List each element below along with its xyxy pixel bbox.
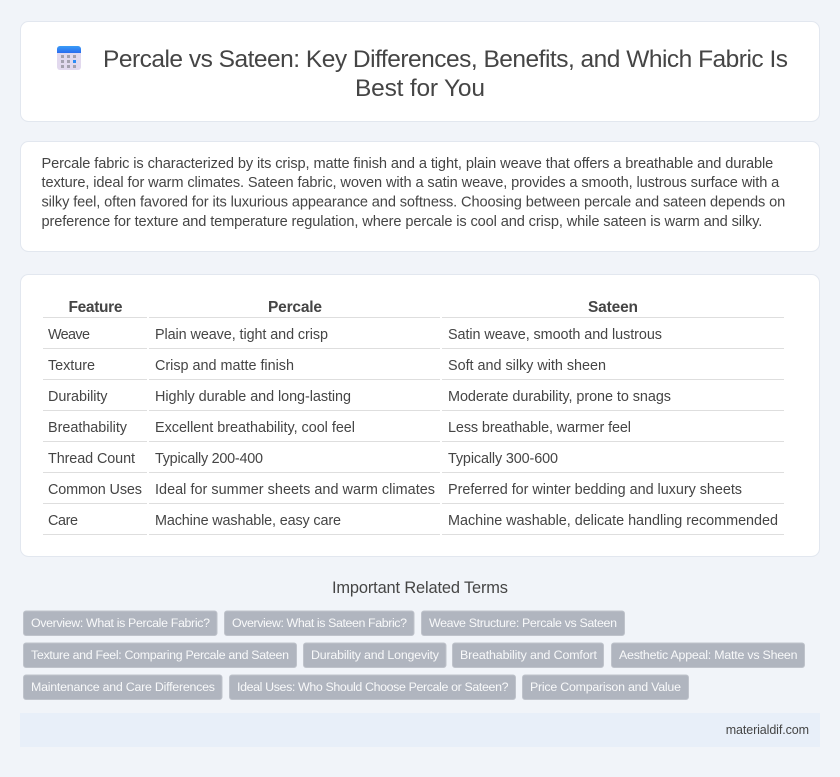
- table row: care: [43, 513, 784, 535]
- chip: Texture and Feel: Comparing Percale and Sateen: [31, 648, 289, 662]
- text block: intro paragraph: texture, ideal for warm climates. Sateen fabric, woven with a satin weave, provides a smooth, lustrous surface with a: [42, 175, 780, 191]
- chip: Overview: What is Percale Fabric?: [31, 616, 210, 630]
- chip: Overview: What is Sateen Fabric?: [232, 616, 407, 630]
- table row: weave: Weave: [48, 327, 90, 343]
- table row: breathability: [43, 420, 784, 442]
- table header: Sateen: [588, 299, 638, 316]
- table row: durability: [43, 389, 784, 411]
- chip: Breathability and Comfort: [460, 648, 598, 662]
- table row: weave: Satin weave, smooth and lustrous: [448, 327, 662, 343]
- chip: [24, 643, 296, 668]
- text block: intro paragraph: Percale fabric is characterized by its crisp, matte finish and a tight, plain weave that offers a breathable and durable: [42, 156, 773, 172]
- heading: related terms: Important Related Terms: [332, 579, 508, 597]
- table row: texture: Crisp and matte finish: [155, 358, 294, 374]
- related terms chips: [24, 611, 804, 700]
- table header: [43, 299, 784, 318]
- table row: thread count: Thread Count: [48, 451, 135, 467]
- text block: intro paragraph: silky feel, often favored for its luxurious appearance and softness. Choosing between percale and sateen depends on: [42, 194, 785, 210]
- text block: intro paragraph: preference for texture and temperature regulation, where percale is cool and crisp, while sateen is warm and silky.: [42, 214, 762, 230]
- table row: texture: Texture: [48, 358, 95, 374]
- chip: [452, 643, 604, 668]
- chip: [24, 611, 217, 636]
- chip: Ideal Uses: Who Should Choose Percale or Sateen?: [237, 680, 509, 694]
- icon: calendar: [57, 46, 81, 70]
- table header: Feature: [68, 299, 123, 316]
- chip: [230, 675, 516, 700]
- chip: Maintenance and Care Differences: [31, 680, 215, 694]
- chip: [24, 675, 222, 700]
- chip: Weave Structure: Percale vs Sateen: [429, 616, 617, 630]
- chip: Price Comparison and Value: [530, 680, 681, 694]
- table row: care: Machine washable, delicate handling recommended: [448, 513, 778, 529]
- table row: thread count: Typically 300-600: [448, 451, 558, 467]
- footer bar: [20, 713, 820, 747]
- table row: common uses: Preferred for winter bedding and luxury sheets: [448, 482, 742, 498]
- table row: care: Machine washable, easy care: [155, 513, 341, 529]
- table row: texture: [43, 358, 784, 380]
- table row: common uses: Common Uses: [48, 482, 142, 498]
- table row: texture: Soft and silky with sheen: [448, 358, 606, 374]
- table row: breathability: Excellent breathability, cool feel: [155, 420, 355, 436]
- table header: Percale: [268, 299, 322, 316]
- chip: [304, 643, 446, 668]
- table row: weave: Plain weave, tight and crisp: [155, 327, 328, 343]
- chip: [612, 643, 804, 668]
- table row: thread count: [43, 451, 784, 473]
- table row: care: Care: [48, 513, 78, 529]
- chip: [224, 611, 414, 636]
- title: Best for You: [355, 75, 485, 102]
- table row: durability: Moderate durability, prone to snags: [448, 389, 671, 405]
- table row: durability: Durability: [48, 389, 108, 405]
- table row: weave: [43, 327, 784, 349]
- table row: common uses: Ideal for summer sheets and warm climates: [155, 482, 435, 498]
- title: [103, 46, 788, 102]
- chip: Aesthetic Appeal: Matte vs Sheen: [619, 648, 798, 662]
- chip: Durability and Longevity: [311, 648, 440, 662]
- table row: common uses: [43, 482, 784, 504]
- table row: durability: Highly durable and long-lasting: [155, 389, 351, 405]
- table row: breathability: Breathability: [48, 420, 128, 436]
- table row: thread count: Typically 200-400: [155, 451, 263, 467]
- table row: breathability: Less breathable, warmer feel: [448, 420, 631, 436]
- title: Percale vs Sateen: Key Differences, Benefits, and Which Fabric Is: [103, 46, 788, 73]
- chip: [522, 675, 688, 700]
- panel: title header: [20, 22, 820, 122]
- panel: comparison table: [20, 274, 820, 556]
- footer bar: materialdif.com: [726, 723, 809, 737]
- chip: [422, 611, 624, 636]
- text block: intro paragraph: [42, 156, 785, 230]
- panel: intro text: [20, 142, 820, 252]
